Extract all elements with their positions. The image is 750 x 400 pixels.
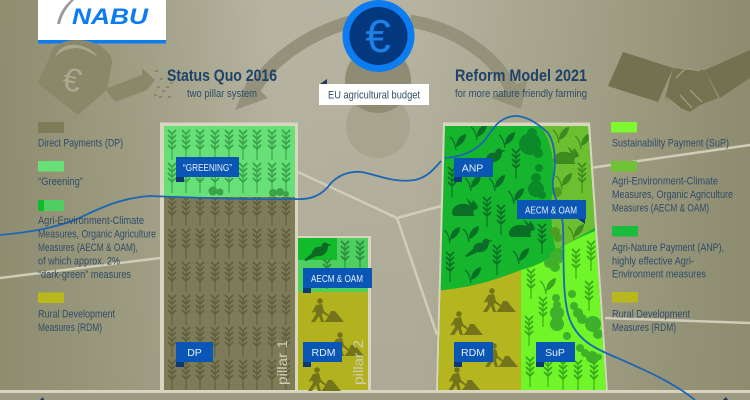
label: RDM pillar 2 [303, 342, 342, 367]
label: DP: DP [187, 347, 202, 359]
sustainability wheat [525, 241, 598, 390]
label: AECM and OAM reform [517, 200, 586, 224]
text: rural development [38, 308, 115, 334]
text: agri-nature payment: highly effective Agri- [612, 256, 694, 268]
panel: pillar 1 [160, 122, 298, 392]
trees on sustainability field [544, 248, 603, 363]
bottom strip [0, 390, 750, 400]
direct payments area [164, 197, 295, 390]
dark-green area [298, 238, 337, 260]
label: SuP [536, 342, 575, 367]
trees [519, 128, 546, 199]
rural development field [438, 270, 521, 390]
pillar 1 label: pillar 1 [274, 340, 290, 385]
swatch: AECM [38, 200, 64, 211]
wheat in direct payments area [168, 196, 290, 390]
icon: watering can [37, 40, 173, 115]
text: agri-nature payment [612, 242, 724, 280]
text: AECM: Agri-Environment-Climate [612, 176, 718, 188]
heading: reform model: for more nature friendly farming [455, 88, 587, 100]
text: rural development: Measures (RDM) [38, 322, 102, 334]
AECM field [542, 126, 595, 250]
AECM wheat and wildlife [553, 127, 591, 240]
text: rural development: Measures (RDM) [612, 322, 676, 334]
wheat group [323, 241, 364, 289]
text: AECM: Measures (AECM & OAM), [38, 242, 138, 254]
river [0, 116, 695, 400]
text: rural development: Rural Development [38, 308, 115, 320]
heading: reform model [455, 67, 587, 100]
text: rural development: Rural Development [612, 308, 690, 320]
icon: handshake [608, 50, 750, 112]
text: AECM: “dark-green” measures [38, 269, 131, 281]
logo [38, 0, 166, 44]
workers [448, 288, 518, 391]
panel: reform model [436, 122, 608, 390]
budget flow arrows [235, 21, 528, 110]
label: ANP [454, 158, 493, 182]
field paths [0, 145, 750, 335]
pillar 2 label: pillar 2 [350, 340, 366, 385]
swatch: agri-nature payment [612, 226, 638, 236]
callout: EU agricultural budget: EU agricultural budget [328, 90, 420, 102]
text: agri-nature payment: Agri-Nature Payment (ANP), [612, 242, 724, 254]
swatch: rural development [38, 292, 64, 303]
text: AECM [38, 215, 156, 281]
label: DP [176, 342, 213, 367]
greening area [164, 126, 295, 197]
label: AECM and OAM pillar 2: AECM & OAM [311, 273, 363, 285]
swatch: sustainability payment [611, 122, 637, 132]
sustainability field [521, 231, 606, 390]
label: SuP: SuP [545, 347, 565, 359]
heading: status quo: two pillar system [187, 88, 257, 100]
text: AECM: Measures (AECM & OAM) [612, 202, 709, 214]
icon: watering can: € [59, 60, 85, 100]
label: RDM reform [454, 342, 493, 367]
swatch: greening [38, 161, 64, 172]
text: AECM: Agri-Environment-Climate [38, 215, 144, 227]
swatch: AECM [611, 161, 637, 172]
text: direct payments: Direct Payments (DP) [38, 138, 123, 150]
callout: EU agricultural budget [319, 79, 429, 105]
label: RDM reform: RDM [461, 347, 485, 359]
label: greening: “GREENING” [183, 162, 232, 174]
text: AECM: of which approx. 2% [38, 256, 120, 268]
label: greening [176, 157, 239, 182]
text: AECM [612, 176, 733, 214]
label: AECM and OAM reform: AECM & OAM [525, 204, 577, 216]
label: AECM and OAM pillar 2 [303, 268, 372, 293]
ANP wheat and wildlife [444, 124, 546, 283]
budget coins [345, 47, 411, 158]
AECM area [298, 238, 368, 292]
icon: bird [304, 243, 332, 261]
swatch: direct payments [38, 122, 64, 133]
logo: NABU [72, 4, 149, 29]
workers [308, 298, 364, 391]
swatch: rural development [612, 292, 638, 302]
wheat in greening area [168, 130, 290, 197]
panel: pillar 2 [295, 236, 371, 392]
heading: reform model: Reform Model 2021 [455, 67, 587, 85]
legend: status quo [38, 122, 156, 334]
text: rural development [612, 308, 690, 334]
text: AECM: Measures, Organic Agriculture [38, 229, 156, 241]
text: agri-nature payment: Environment measures [612, 268, 706, 280]
text: greening: “Greening” [38, 176, 83, 188]
rural development area [298, 292, 368, 390]
heading: status quo: Status Quo 2016 [167, 67, 277, 85]
euro coin icon: € [365, 10, 391, 62]
reform model fields [438, 126, 606, 390]
legend: reform model [611, 122, 733, 334]
label: ANP: ANP [462, 162, 483, 174]
trees on AECM field [550, 187, 562, 242]
euro coin icon [342, 0, 414, 72]
heading: status quo [167, 67, 277, 100]
label: RDM pillar 2: RDM [312, 347, 335, 359]
